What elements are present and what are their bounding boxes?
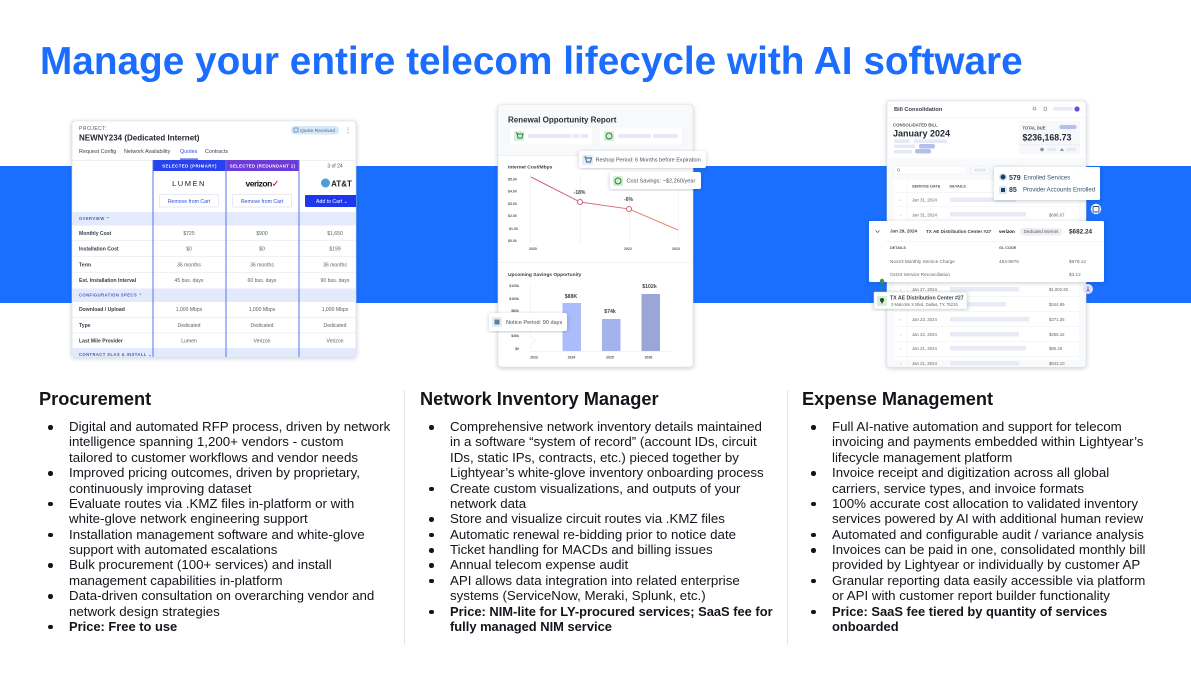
row labels: CONFIGURATION SPECS ⌃	[79, 292, 142, 298]
selected column headers: SELECTED (PRIMARY)	[162, 164, 217, 169]
cart buttons: Add to Cart ⌄	[316, 199, 348, 205]
quote values: $1,650	[327, 231, 343, 237]
tabs	[72, 149, 356, 161]
bands	[72, 212, 356, 357]
row separators	[72, 240, 356, 333]
procurement bullet list: Bulk procurement (100+ services) and install	[69, 557, 332, 572]
row labels: Type	[79, 323, 91, 329]
bill table: Jan 23, 2024	[912, 317, 937, 322]
procurement bullet list: Data-driven consultation on overarching vendor and	[69, 588, 374, 603]
quote values: 90 bus. days	[321, 278, 350, 284]
tabs: Contracts	[205, 149, 228, 155]
quote values: Dedicated	[251, 323, 274, 329]
row labels	[79, 216, 152, 357]
bar chart: upcoming savings opportunity: $102k	[642, 284, 657, 290]
quote values: Verizon	[326, 338, 344, 344]
procurement bullet list: intelligence spanning 1,200+ vendors - custom	[69, 434, 344, 449]
project header: Quote Received	[300, 128, 335, 134]
bar chart: upcoming savings opportunity: $120k	[509, 284, 519, 288]
quote values: 1,000 Mbps	[249, 307, 276, 313]
line chart: internet cost per Mbps: 2020	[529, 247, 537, 251]
expanded bill row: $682.24	[1069, 228, 1093, 236]
project header	[79, 126, 351, 142]
bill table: ›	[900, 212, 902, 218]
procurement bullet list: continuously improving dataset	[69, 480, 252, 496]
bill table: Jan 22, 2024	[912, 332, 937, 337]
expanded bill row: Oct23 Service Reconciliation	[890, 272, 950, 277]
consolidated bill heading: CONSOLIDATED BILL	[893, 122, 938, 128]
expense management bullet list: Price: SaaS fee tiered by quantity of services	[832, 604, 1107, 618]
title: Manage your entire telecom lifecycle with AI software	[40, 40, 1023, 83]
bar chart: upcoming savings opportunity: 2024	[568, 356, 575, 360]
network inventory bullet list: Create custom visualizations, and outputs of your	[450, 480, 740, 496]
bar chart: upcoming savings opportunity: $60k	[511, 322, 519, 326]
expanded bill row: $679.12	[1069, 259, 1086, 264]
expense management bullet list: lifecycle management platform	[832, 450, 1012, 465]
row labels: Term	[79, 262, 92, 268]
location card	[874, 279, 967, 309]
bar chart: upcoming savings opportunity: 2023	[530, 356, 538, 360]
bill table: ›	[900, 346, 902, 351]
heading: expense management: Expense Management	[802, 389, 993, 409]
panel: procurement text	[39, 389, 390, 634]
network inventory bullet list: Comprehensive network inventory details maintained	[450, 419, 762, 434]
app header	[894, 106, 1080, 113]
cart buttons: Remove from Cart	[168, 199, 211, 205]
bar chart: upcoming savings opportunity	[508, 272, 671, 360]
quote values: Verizon	[254, 338, 271, 344]
heading: network inventory manager: Network Inventory Manager	[420, 389, 659, 409]
network inventory bullet list	[429, 419, 773, 634]
procurement bullet list: Improved pricing outcomes, driven by proprietary,	[69, 465, 360, 480]
quote values: Dedicated	[178, 323, 201, 329]
callout: notice period: Notice Period: 90 days	[506, 320, 562, 326]
quote values: $0	[186, 246, 192, 252]
bar chart: upcoming savings opportunity: 2026	[645, 356, 652, 360]
row labels: OVERVIEW ⌃	[79, 216, 110, 221]
cart buttons: Remove from Cart	[241, 199, 284, 205]
quote values: 1,000 Mbps	[322, 307, 349, 313]
line chart: internet cost per Mbps: $1.00	[509, 227, 518, 231]
network inventory bullet list: Annual telecom expense audit	[450, 557, 628, 572]
callout: enrolled services and accounts: 579	[1009, 175, 1021, 182]
panel: procurement quotes	[72, 121, 356, 357]
line chart: internet cost per Mbps: $0.00	[508, 239, 517, 243]
product screenshots	[70, 100, 1106, 370]
panel: expense management text	[802, 389, 1145, 634]
total due card: $236,168.73	[1022, 132, 1072, 142]
row labels: Last Mile Provider	[79, 338, 123, 344]
project header: ⋮	[345, 128, 351, 134]
callout: notice period	[489, 313, 567, 331]
heading: procurement: Procurement	[39, 389, 151, 409]
bill table: Jan 27, 2024	[912, 287, 937, 292]
network inventory bullet list: Automatic renewal re-bidding prior to notice date	[450, 527, 736, 542]
total due card: TOTAL DUE	[1022, 126, 1046, 130]
procurement bullet list: Evaluate routes via .KMZ files in-platform or with	[69, 496, 354, 511]
bill table: ›	[900, 302, 902, 307]
bill table: ›	[900, 332, 902, 337]
expanded bill row: GL CODE	[999, 246, 1017, 250]
icon: calendar badge	[1091, 204, 1101, 214]
bar chart: upcoming savings opportunity: $0	[515, 347, 519, 351]
expense management bullet list: invoicing and payments embedded within Lightyear’s	[832, 434, 1143, 449]
line chart: internet cost per Mbps: 2022	[624, 247, 632, 251]
network inventory bullet list: IDs, static IPs, contracts, etc.) pieced together by	[450, 450, 739, 465]
expanded bill row: Nov23 Monthly Service Charge	[890, 259, 955, 264]
callout: cost savings: Cost Savings: ~$2,260/year	[626, 178, 696, 184]
bill table: $696.67	[1049, 212, 1065, 218]
network inventory bullet list: Ticket handling for MACDs and billing issues	[450, 542, 713, 557]
cart buttons	[160, 194, 356, 207]
bill table: $266.42	[1049, 332, 1065, 337]
bill table: SERVICE DATE	[912, 184, 941, 188]
row labels: Monthly Cost	[79, 231, 112, 237]
procurement bullet list: Digital and automated RFP process, driven by network	[69, 419, 390, 434]
line chart: internet cost per Mbps: $3.00	[508, 202, 517, 206]
report heading: Renewal Opportunity Report	[508, 116, 617, 124]
expense management bullet list: Automated and configurable audit / variance analysis	[832, 527, 1144, 542]
bar chart: upcoming savings opportunity: $40k	[511, 334, 519, 338]
location card: 3 Malcolm X Blvd, Dallas, TX 75215	[891, 302, 958, 307]
expanded bill row: Jan 29, 2024	[890, 228, 918, 234]
bill table: ›	[900, 287, 902, 292]
bill table: $371.35	[1049, 317, 1065, 322]
line chart: internet cost per Mbps: Internet Cost/Mbps	[508, 164, 553, 170]
quote values: 36 months	[250, 262, 274, 268]
vendor logos: AT&T	[331, 180, 352, 188]
quote values: 45 bus. days	[175, 278, 204, 284]
quote values: 60 bus. days	[248, 278, 277, 284]
column outlines	[153, 160, 299, 357]
expense management bullet list: Invoice receipt and digitization across all global	[832, 465, 1109, 480]
bill table: $85.26	[1049, 346, 1063, 351]
line chart: internet cost per Mbps: $5.00	[508, 178, 517, 182]
expense management bullet list: onboarded	[832, 619, 899, 634]
bar chart: upcoming savings opportunity: $80k	[511, 309, 519, 313]
callout: enrolled services and accounts: Provider Accounts Enrolled	[1023, 188, 1095, 194]
network inventory bullet list: Lightyear’s white-glove inventory onboarding process	[450, 465, 764, 480]
bar chart: upcoming savings opportunity: $100k	[509, 297, 519, 301]
bill table: Jan 24, 2024	[912, 302, 937, 307]
bill table: $843.10	[1049, 361, 1065, 366]
tabs: Quotes	[180, 149, 198, 155]
expense management bullet list	[811, 419, 1145, 634]
expense management bullet list: services powered by AI with additional human review	[832, 511, 1143, 526]
expanded bill row: DETAILS	[890, 246, 906, 250]
bill table: ›	[900, 317, 902, 322]
quote values: $199	[329, 246, 341, 252]
network inventory bullet list: in a software “system of record” (account IDs, circuit	[450, 434, 757, 449]
quote values: $725	[183, 231, 195, 237]
vendor logos: verizon✓	[246, 178, 279, 188]
location card: TX AE Distribution Center #27	[890, 296, 964, 302]
summary cards	[509, 127, 683, 145]
expense management bullet list: carriers, service types, and invoice formats	[832, 480, 1084, 496]
network inventory bullet list: Price: NIM-lite for LY-procured services; SaaS fee for	[450, 604, 773, 618]
expense management bullet list: or API with customer report builder functionality	[832, 588, 1110, 603]
vendor logos: LUMEN	[172, 179, 206, 188]
procurement bullet list: white-glove network engineering support	[69, 511, 308, 526]
network inventory bullet list: API allows data integration into related enterprise	[450, 573, 740, 588]
quote values: 1,000 Mbps	[176, 307, 203, 313]
bar chart: upcoming savings opportunity: $88K	[565, 294, 577, 300]
consolidated bill heading	[893, 122, 950, 154]
row labels: Installation Cost	[79, 246, 119, 252]
total due card	[1019, 121, 1080, 154]
panel: renewal opportunity report	[489, 105, 706, 367]
network inventory bullet list: network data	[450, 496, 526, 511]
selected column headers	[153, 160, 343, 171]
bill table: ›	[900, 361, 902, 366]
app header: Bill Consolidation	[894, 107, 943, 113]
procurement bullet list: tailored to customer workflows and vendor needs	[69, 450, 358, 465]
bill table	[894, 180, 1079, 367]
network inventory bullet list: Store and visualize circuit routes via .KMZ files	[450, 511, 725, 526]
expanded bill row: 454-9976	[999, 259, 1019, 264]
bill table: ›	[900, 198, 902, 202]
callout: enrolled services and accounts: Enrolled Services	[1024, 176, 1070, 182]
bill table: Jan 21, 2024	[912, 346, 937, 351]
procurement bullet list: management capabilities in-platform	[69, 573, 283, 588]
panel: network inventory manager text	[420, 389, 773, 634]
bill table: $1,802.82	[1049, 287, 1069, 292]
row labels: Est. Installation Interval	[79, 278, 137, 284]
line chart: internet cost per Mbps: 2023	[672, 247, 680, 251]
tabs: Request Config	[79, 149, 116, 155]
quote values: 36 months	[323, 262, 347, 268]
bill table: DETAILS	[950, 184, 966, 188]
blue background band	[0, 166, 1191, 303]
bar chart: upcoming savings opportunity: $74k	[604, 309, 616, 315]
expense management bullet list: Full AI-native automation and support for telecom	[832, 419, 1122, 434]
callout: reshop period	[579, 151, 706, 168]
expense management bullet list: Granular reporting data easily accessible via platform	[832, 573, 1145, 588]
vendor logos	[172, 178, 352, 188]
row labels: Download / Upload	[79, 307, 125, 313]
expanded bill row	[869, 221, 1104, 282]
expanded bill row: TX AE Distribution Center #27	[926, 229, 992, 234]
bar chart: upcoming savings opportunity: Upcoming Savings Opportunity	[508, 272, 582, 278]
panel: bill consolidation	[869, 101, 1104, 367]
expanded bill row: Dedicated Internet	[1024, 229, 1059, 234]
quote values: Lumen	[181, 338, 197, 344]
bill table: $344.89	[1049, 302, 1065, 307]
expense management bullet list: provided by Lightyear or individually by customer AP	[832, 557, 1140, 572]
expanded bill row: $3.12	[1069, 272, 1081, 277]
project header: PROJECT:	[79, 126, 107, 132]
callout: reshop period: Reshop Period: 6 Months before Expiration	[596, 158, 701, 164]
callout: enrolled services and accounts: 85	[1009, 187, 1017, 194]
callout: cost savings	[610, 172, 701, 189]
filter bar	[894, 166, 1020, 174]
consolidated bill heading: January 2024	[893, 128, 950, 138]
bar chart: upcoming savings opportunity: 2025	[606, 356, 614, 360]
project header: NEWNY234 (Dedicated Internet)	[79, 134, 200, 142]
quote values: Dedicated	[324, 323, 347, 329]
selected column headers: 3 of 24	[327, 164, 343, 170]
procurement bullet list: support with automated escalations	[69, 542, 277, 557]
procurement bullet list: network design strategies	[69, 604, 220, 618]
quote values	[175, 231, 350, 344]
procurement bullet list: Price: Free to use	[69, 619, 177, 634]
row labels: CONTRACT SLAS & INSTALL ⌄	[79, 352, 152, 357]
expense management bullet list: Invoices can be paid in one, consolidated monthly bill	[832, 542, 1145, 557]
quote values: $0	[259, 246, 265, 252]
quote values: 36 months	[177, 262, 201, 268]
expense management bullet list: 100% accurate cost allocation to validated inventory	[832, 496, 1138, 511]
line chart: internet cost per Mbps: -18%	[574, 190, 586, 196]
selected column headers: SELECTED (REDUNDANT 1)	[230, 164, 295, 169]
tabs: Network Availability	[124, 149, 171, 155]
icon: person badge	[1083, 284, 1093, 294]
procurement bullet list	[48, 419, 390, 634]
bill table: Jan 31, 2024	[912, 198, 937, 202]
line chart: internet cost per Mbps	[508, 164, 680, 251]
bill table: Jan 31, 2024	[912, 212, 937, 218]
network inventory bullet list: fully managed NIM service	[450, 619, 612, 634]
procurement bullet list: Installation management software and white-glove	[69, 527, 365, 542]
quote values: $900	[256, 231, 268, 237]
line chart: internet cost per Mbps: -6%	[624, 197, 633, 203]
line chart: internet cost per Mbps: $4.00	[508, 190, 517, 194]
network inventory bullet list: systems (ServiceNow, Meraki, Splunk, etc.)	[450, 588, 706, 603]
bill table: Jan 21, 2024	[912, 361, 937, 366]
line chart: internet cost per Mbps: $2.00	[508, 214, 517, 218]
expanded bill row: verizon	[999, 229, 1015, 234]
callout: enrolled services and accounts	[994, 167, 1100, 200]
